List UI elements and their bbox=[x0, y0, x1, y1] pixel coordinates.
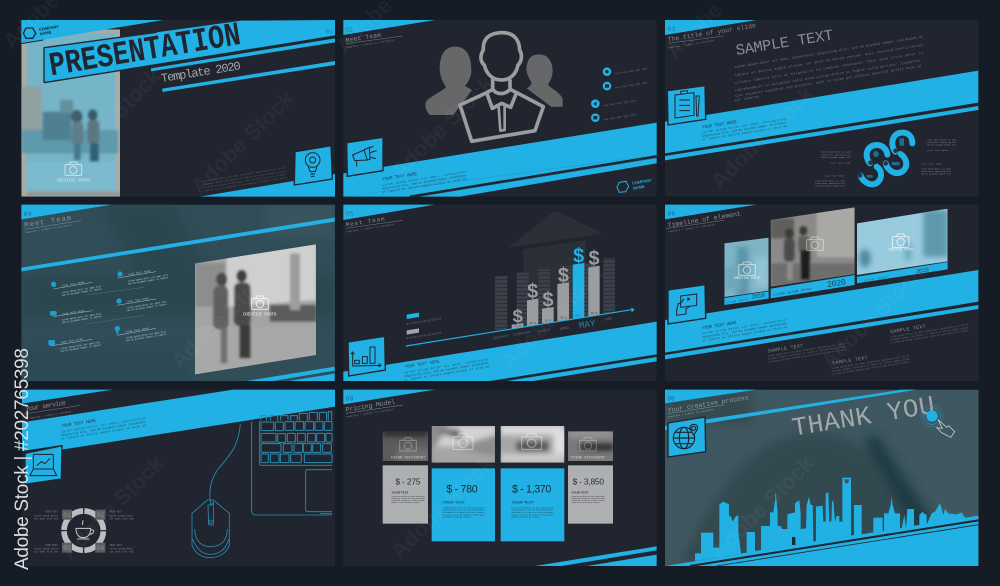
pricing photo 2 bbox=[432, 425, 497, 465]
title band: PRESENTATION bbox=[47, 17, 244, 86]
price card 780 bbox=[432, 468, 495, 541]
blue diagonal stripe bbox=[21, 218, 335, 271]
pricing photo 4 bbox=[568, 428, 613, 461]
band text: Lorem ipsum dolor sit amet, consectetur bbox=[382, 169, 467, 187]
watermarks: Adobe Stock bbox=[186, 85, 299, 199]
bar chart: 00.0 bbox=[560, 317, 567, 320]
subtitle with stripes bbox=[151, 38, 335, 92]
price card 780: aliqua ut enim ad minim veniam quis bbox=[442, 513, 484, 516]
band text: ut labore et dolore magna aliqua ut enim ad bbox=[702, 325, 788, 343]
top-left blue corner with company name: COMPANY bbox=[39, 24, 60, 32]
band text: ut labore et dolore magna aliqua ut enim ad bbox=[382, 177, 467, 194]
text block B: Lorem ipsum dolor sit amet consectetur adipiscing elit sed do bbox=[832, 354, 910, 370]
blue band bbox=[665, 270, 978, 353]
donut diagram: 01 bbox=[63, 512, 71, 519]
slide heading: Your creative process bbox=[667, 393, 749, 414]
band text: adipiscing elit, sed do eiusmod tempor incididunt bbox=[61, 420, 146, 437]
price card 780: Lorem ipsum dolor sit amet consectetur bbox=[442, 506, 485, 509]
bar chart: $ bbox=[588, 249, 600, 272]
slide heading bbox=[345, 32, 403, 49]
blue band bbox=[22, 390, 335, 451]
band text: Lorem ipsum dolor sit amet, consectetur bbox=[404, 357, 490, 375]
cover photo bbox=[21, 29, 120, 197]
band text bbox=[61, 416, 146, 441]
slide heading: Template | simple to customize bbox=[668, 223, 715, 234]
icon: megaphone bbox=[347, 137, 383, 176]
text block B: eiusmod tempor incididunt ut labore et dolore magna aliqua bbox=[832, 357, 910, 373]
caption 2020 bbox=[771, 275, 855, 298]
feature list: sed do eiusmod tempor ut labore bbox=[126, 303, 168, 312]
pricing photo 1 bbox=[382, 432, 428, 461]
band text: Lorem ipsum dolor sit amet, consectetur bbox=[61, 416, 146, 434]
donut labels: YOUR TEXT bbox=[45, 544, 58, 547]
company logo: COMPANY bbox=[632, 177, 653, 186]
feature list: sed do eiusmod tempor ut labore bbox=[126, 333, 167, 342]
blue band bbox=[343, 123, 657, 197]
feature list: Lorem ipsum dolor sit amet elit bbox=[62, 312, 102, 322]
bar chart: 00.0 bbox=[575, 315, 582, 318]
slide heading: Template | simple to customize bbox=[29, 410, 72, 420]
swirl labels: consectetur adipiscing elit bbox=[927, 141, 957, 144]
price card 3850: aliqua ut enim ad minim veniam bbox=[571, 501, 600, 504]
price card 1370: YOUR TEXT bbox=[511, 499, 535, 504]
text block C: SAMPLE TEXT bbox=[890, 324, 926, 335]
band text: YOUR TEXT HERE bbox=[702, 320, 737, 331]
subtitle with stripes: Template 2020 bbox=[160, 59, 242, 86]
top-left blue corner bbox=[665, 390, 757, 403]
caption 2018: 2018 bbox=[751, 292, 766, 301]
slide heading: Template | simple to customize bbox=[346, 408, 394, 419]
text block C: eiusmod tempor incididunt ut labore et dolore magna aliqua bbox=[890, 326, 969, 342]
laptop outline bbox=[252, 412, 332, 515]
paragraph: reprehenderit in voluptate velit esse cillum dolore eu fugiat nulla pariatur. Excepteur bbox=[735, 58, 921, 92]
slide heading: Template | simple to customize bbox=[24, 224, 72, 234]
paragraph: ullamco laboris nisi ut aliquip ex ea commodo consequat. Duis aute irure dolor in bbox=[735, 51, 923, 85]
donut labels: Lorem ipsum dolor bbox=[34, 514, 59, 517]
slide heading: Your service bbox=[25, 399, 66, 413]
feature list: YOUR TEXT HERE bbox=[62, 309, 85, 316]
price card 780: $ - 780 bbox=[446, 483, 478, 495]
swirl labels: consectetur adipiscing elit bbox=[921, 170, 952, 173]
donut diagram bbox=[62, 510, 105, 553]
donut labels: sit amet elit sed bbox=[109, 551, 134, 554]
band text: adipiscing elit, sed do eiusmod tempor incididunt bbox=[404, 361, 490, 378]
slide 01: cover bbox=[21, 17, 335, 197]
top-left blue corner bbox=[343, 390, 435, 404]
contact list: +00 000 000 000 000 bbox=[603, 99, 636, 108]
slide 08: pricing model bbox=[343, 390, 657, 566]
slide heading: Template | simple to customize bbox=[346, 223, 394, 234]
swirl labels: YOUR TEXT HERE bbox=[830, 162, 851, 165]
slide heading: Template | simple to customize bbox=[668, 408, 715, 419]
photo 2018 bbox=[724, 238, 769, 297]
slide number: 06 bbox=[668, 210, 676, 218]
small caption text: laboris nisi ut aliquip ex ea commodo consequat duis aute bbox=[203, 176, 287, 193]
thank you heading: THANK YOU bbox=[790, 391, 937, 444]
bottom blue stripes bbox=[665, 516, 978, 566]
watermarks: Adobe Stock bbox=[166, 260, 279, 374]
month labels: FEBRUARY bbox=[513, 331, 533, 338]
contact list: +00 000 000 000 000 bbox=[615, 81, 648, 90]
price card 1370: Lorem ipsum dolor sit amet consectetur bbox=[511, 506, 554, 509]
feature list: Lorem ipsum dolor sit amet elit bbox=[62, 285, 102, 294]
caption 2018: Lorem ipsum bbox=[726, 297, 749, 304]
slide 03: sample text bbox=[665, 20, 979, 197]
price card 275: Lorem ipsum dolor sit amet consectetur bbox=[391, 495, 425, 498]
slide 02: meet team bbox=[343, 20, 657, 197]
text block A: Lorem ipsum dolor sit amet consectetur adipiscing elit sed do bbox=[768, 342, 846, 358]
blue band bbox=[343, 322, 657, 381]
slide heading bbox=[24, 399, 81, 420]
slide heading bbox=[345, 398, 403, 419]
band text: YOUR TEXT HERE bbox=[702, 119, 737, 131]
slide heading: Template | simple to customize bbox=[346, 39, 394, 49]
text block A: SAMPLE TEXT bbox=[767, 343, 804, 355]
price card 275: adipiscing elit sed do eiusmod tempor bbox=[391, 497, 425, 500]
small caption text: eiusmod tempor incididunt ut labore et dolore magna aliqua bbox=[203, 170, 287, 186]
axis arrow bbox=[406, 307, 635, 346]
donut diagram: 02 bbox=[97, 512, 104, 519]
donut labels: sit amet elit sed bbox=[109, 517, 134, 520]
price card 1370: nostrud exercitation ullamco bbox=[511, 516, 540, 519]
slide 06: timeline bbox=[665, 205, 979, 381]
bar chart bbox=[512, 246, 600, 329]
slide heading: Meet Team bbox=[345, 215, 386, 229]
price card 1370: incididunt ut labore et dolore magna bbox=[511, 511, 554, 514]
slide heading: The title of your slide bbox=[667, 21, 757, 44]
slide number: 01 bbox=[325, 28, 333, 35]
contact list: +00 000 000 000 000 bbox=[603, 113, 636, 122]
feature list: sed do eiusmod tempor ut labore bbox=[128, 276, 169, 286]
photo 2018: CREATIVE PHOTO bbox=[734, 277, 761, 281]
price card 1370: adipiscing elit sed do eiusmod tempor bbox=[511, 509, 554, 512]
price card 780: YOUR TEXT bbox=[442, 499, 466, 504]
text block B: ut enim ad minim veniam quis nostrud exercitation ullamco bbox=[832, 360, 910, 376]
dark divider bbox=[410, 156, 657, 197]
price card 780: adipiscing elit sed do eiusmod tempor bbox=[442, 509, 485, 512]
vertical stock id: Adobe Stock | #202765398 bbox=[12, 348, 33, 570]
bottom-right stripes bbox=[246, 367, 335, 381]
band text: ut labore et dolore magna aliqua ut enim ad bbox=[61, 423, 146, 441]
bar chart: 00.0 bbox=[545, 319, 552, 322]
bar chart: $ bbox=[573, 246, 585, 269]
price card 3850: incididunt ut labore et dolore magna bbox=[571, 499, 605, 502]
text block B: SAMPLE TEXT bbox=[832, 355, 868, 367]
sample text heading: SAMPLE TEXT bbox=[735, 26, 835, 60]
text block C: Lorem ipsum dolor sit amet consectetur adipiscing elit sed do bbox=[890, 323, 969, 339]
swirl diagram bbox=[858, 133, 912, 184]
band text: YOUR TEXT HERE bbox=[405, 359, 440, 370]
donut diagram: 04 bbox=[97, 545, 104, 552]
blue band bbox=[665, 71, 978, 153]
top-left blue corner bbox=[22, 390, 113, 404]
icon: light bulb bbox=[294, 146, 332, 185]
band text: ut labore et dolore magna aliqua ut enim ad bbox=[404, 364, 490, 382]
feature list: YOUR TEXT HERE bbox=[128, 270, 151, 276]
blue diagonal stripe bbox=[705, 390, 917, 424]
slide heading: Template | simple to customize bbox=[668, 39, 715, 50]
month labels bbox=[492, 317, 613, 341]
pricing photo 3 bbox=[501, 425, 567, 463]
feature list: sed do eiusmod tempor ut labore bbox=[62, 288, 102, 297]
donut labels: Lorem ipsum dolor bbox=[109, 548, 134, 551]
photo 2019 bbox=[857, 209, 948, 275]
swirl labels: sed do eiusmod tempor elit bbox=[821, 156, 852, 159]
click cursor bbox=[921, 405, 955, 437]
text block A: ut enim ad minim veniam quis nostrud exercitation ullamco bbox=[768, 348, 846, 364]
slide 04: meet team with photo bbox=[21, 205, 335, 381]
blue stripe bbox=[665, 106, 978, 160]
caption 2020: 2020 bbox=[826, 277, 847, 290]
swirl labels: sed do eiusmod tempor elit bbox=[815, 185, 846, 188]
bar chart: $ bbox=[527, 281, 539, 304]
price card 275: aliqua ut enim ad minim veniam bbox=[391, 501, 420, 504]
slide heading bbox=[345, 215, 403, 234]
slide number: 09 bbox=[667, 396, 675, 403]
feature list: YOUR TEXT HERE bbox=[126, 327, 149, 334]
company logo: NAME bbox=[633, 184, 645, 191]
band text: ut labore et dolore magna aliqua ut enim ad bbox=[702, 124, 788, 142]
price card 3850: Lorem ipsum dolor sit amet consectetur bbox=[571, 495, 605, 498]
legend: 00000000000000 bbox=[406, 317, 442, 326]
blue stripe bbox=[665, 305, 978, 359]
caption 2019 bbox=[857, 262, 948, 283]
feature list: Lorem ipsum dolor sit amet elit bbox=[128, 273, 169, 283]
slide 09: thank you bbox=[665, 390, 979, 566]
watermarks: Adobe Stock bbox=[56, 450, 169, 564]
paragraph bbox=[735, 35, 923, 102]
bar chart: 00.0 bbox=[514, 325, 521, 328]
small caption text bbox=[203, 166, 287, 193]
swirl labels: Lorem ipsum dolor sit amet bbox=[927, 138, 957, 141]
feature list bbox=[48, 270, 169, 353]
photo 2019: CREATIVE PHOTO bbox=[888, 249, 914, 253]
bank silhouette backdrop bbox=[508, 212, 602, 325]
small caption text: ut enim ad minim veniam quis nostrud exercitation ullamco bbox=[203, 173, 287, 189]
month labels: MAY bbox=[578, 318, 597, 331]
bottom-right stripes bbox=[535, 546, 657, 566]
band text bbox=[702, 318, 788, 343]
price card 275 bbox=[383, 465, 428, 524]
bottom-right blue wedge bbox=[200, 174, 335, 197]
icon: globe with pin bbox=[668, 417, 706, 457]
swirl labels: Lorem ipsum dolor sit amet bbox=[821, 151, 852, 154]
slide number: 05 bbox=[345, 210, 353, 218]
caption 2019: Lorem ipsum bbox=[864, 275, 888, 282]
swirl labels: YOUR TEXT HERE bbox=[927, 149, 948, 152]
striped background bars bbox=[495, 258, 615, 330]
watermarks: Adobe Stock bbox=[706, 80, 819, 194]
watermarks: Adobe Stock bbox=[496, 260, 609, 374]
photo placeholder: CREATIVE PHOTO bbox=[243, 313, 277, 318]
text block C: ut enim ad minim veniam quis nostrud exercitation ullamco bbox=[890, 329, 969, 345]
city skyline bbox=[695, 478, 965, 561]
icon: hand with phone bbox=[668, 285, 706, 324]
price card 780: incididunt ut labore et dolore magna bbox=[442, 511, 485, 514]
price card 780: nostrud exercitation ullamco bbox=[442, 516, 471, 519]
paragraph: labore et dolore magna aliqua. Ut enim ad minim veniam, quis nostrud exercitation bbox=[735, 43, 923, 77]
price card 275: YOUR TEXT bbox=[391, 490, 409, 494]
month labels: JANUARY bbox=[492, 335, 510, 341]
top-left blue corner bbox=[665, 20, 757, 35]
top-left blue corner bbox=[665, 205, 757, 219]
photo 2020 bbox=[771, 207, 857, 287]
icon: team silhouettes back bbox=[425, 47, 563, 115]
donut labels: YOUR TEXT bbox=[109, 511, 123, 514]
donut labels: YOUR TEXT bbox=[45, 511, 58, 514]
swirl labels: Lorem ipsum dolor sit amet bbox=[921, 167, 952, 170]
swirl labels: YOUR TEXT HERE bbox=[921, 162, 942, 165]
slide 07: our service bbox=[22, 390, 335, 566]
icon: coffee cup bbox=[76, 520, 94, 539]
month labels: APRIL bbox=[560, 326, 571, 332]
price card 3850: adipiscing elit sed do eiusmod tempor bbox=[571, 497, 605, 500]
caption 2019: 2019 bbox=[915, 266, 930, 275]
feature list: sed do eiusmod tempor ut labore bbox=[62, 315, 102, 324]
blue stripe bbox=[507, 357, 657, 381]
swirl labels bbox=[815, 138, 957, 188]
price card 275: $ - 275 bbox=[395, 477, 421, 487]
swirl labels: sed do eiusmod tempor elit bbox=[921, 173, 952, 176]
price card 1370: $ - 1,370 bbox=[512, 483, 551, 495]
icon: clipboard bbox=[667, 86, 706, 125]
photo placeholder bbox=[195, 237, 318, 377]
donut labels: Lorem ipsum dolor bbox=[34, 548, 59, 551]
small caption text: Lorem ipsum dolor sit amet consectetur adipiscing elit sed do bbox=[203, 166, 287, 183]
slide heading: Pricing Model bbox=[345, 398, 396, 414]
top-left blue corner bbox=[343, 20, 435, 35]
donut labels bbox=[34, 511, 134, 554]
price card 1370 bbox=[501, 468, 564, 541]
cover photo: CREATIVE PHOTO bbox=[57, 178, 90, 183]
top-left blue corner with company name: NAME bbox=[39, 29, 52, 36]
band text: Lorem ipsum dolor sit amet, consectetur bbox=[702, 318, 788, 335]
feature list: Lorem ipsum dolor sit amet elit bbox=[126, 300, 168, 310]
top-left blue corner bbox=[343, 205, 435, 220]
month labels: JUNE bbox=[604, 317, 613, 323]
slide 05: chart bbox=[343, 205, 657, 382]
band text: adipiscing elit, sed do eiusmod tempor incididunt bbox=[702, 321, 788, 339]
blurred background photo bbox=[665, 390, 979, 566]
pricing photo 1: THINK DIFFERENT bbox=[391, 456, 426, 460]
paragraph: est laborum. bbox=[735, 94, 761, 102]
top-left blue corner bbox=[21, 205, 112, 219]
slide number: 03 bbox=[667, 25, 675, 33]
slide heading: Meet Team bbox=[345, 32, 382, 44]
band text bbox=[702, 117, 788, 142]
slide number: 02 bbox=[345, 25, 353, 33]
donut labels: YOUR TEXT bbox=[109, 544, 123, 547]
paragraph: Lorem ipsum dolor sit amet, consectetur adipiscing elit, sed do eiusmod tempor incididunt ut bbox=[735, 35, 923, 69]
watermarks: Adobe Stock bbox=[386, 450, 499, 564]
slide number: 08 bbox=[345, 394, 353, 402]
bar chart: $ bbox=[542, 290, 554, 313]
swirl labels: YOUR TEXT HERE bbox=[824, 174, 845, 177]
price card 3850: $ - 3,850 bbox=[573, 477, 604, 487]
swirl labels: sed do eiusmod tempor elit bbox=[927, 144, 957, 147]
text block A: eiusmod tempor incididunt ut labore et dolore magna aliqua bbox=[768, 345, 846, 361]
legend bbox=[406, 313, 442, 340]
icon: bar chart bbox=[348, 336, 385, 376]
swirl labels: Lorem ipsum dolor sit amet bbox=[815, 179, 846, 182]
bar chart: $ bbox=[557, 265, 569, 288]
band text: adipiscing elit, sed do eiusmod tempor incididunt bbox=[382, 173, 467, 191]
feature list: YOUR TEXT HERE bbox=[126, 297, 150, 304]
icon: central person outline bbox=[460, 33, 543, 141]
slide heading: Timeline of element bbox=[667, 210, 741, 229]
donut labels: sit amet elit sed bbox=[34, 517, 59, 520]
band text: YOUR TEXT HERE bbox=[382, 171, 418, 183]
price card 1370: aliqua ut enim ad minim veniam quis bbox=[511, 513, 553, 516]
feature list: YOUR TEXT HERE bbox=[60, 338, 84, 344]
band text: adipiscing elit, sed do eiusmod tempor incididunt bbox=[702, 120, 788, 138]
feature list: Lorem ipsum dolor sit amet elit bbox=[126, 330, 167, 340]
donut labels: sit amet elit sed bbox=[34, 551, 59, 554]
band text: Lorem ipsum dolor sit amet, consectetur bbox=[702, 117, 788, 134]
pricing photo 4: THINK DIFFERENT bbox=[570, 456, 606, 460]
swirl labels: consectetur adipiscing elit bbox=[821, 153, 852, 156]
watermarks: Adobe Stock bbox=[386, 70, 499, 184]
price card 3850 bbox=[568, 465, 613, 524]
legend: 00000000000000 bbox=[406, 332, 442, 340]
paragraph: sint occaecat cupidatat non proident, sunt in culpa qui officia deserunt mollit anim id bbox=[735, 64, 921, 98]
band text bbox=[404, 357, 490, 382]
bar chart: $ bbox=[512, 306, 523, 328]
price card 3850: YOUR TEXT bbox=[571, 490, 589, 494]
mouse outline bbox=[192, 424, 240, 558]
feature list: Lorem ipsum dolor sit amet elit bbox=[60, 341, 102, 350]
price card 275: incididunt ut labore et dolore magna bbox=[391, 499, 425, 502]
band text bbox=[382, 169, 467, 194]
watermarks: Adobe Stock bbox=[816, 260, 929, 374]
watermarks: Adobe Stock bbox=[706, 450, 819, 564]
blue stripe with dark cut bbox=[419, 158, 657, 197]
bar chart: 00.0 bbox=[591, 312, 598, 315]
slide heading: Meet Team bbox=[24, 215, 72, 230]
swirl labels: consectetur adipiscing elit bbox=[815, 182, 846, 185]
slide number: 04 bbox=[24, 210, 32, 218]
caption 2018 bbox=[724, 291, 769, 305]
company logo bbox=[617, 177, 653, 192]
donut diagram: 03 bbox=[63, 545, 71, 552]
donut labels: Lorem ipsum dolor bbox=[109, 514, 134, 517]
blurred background photo bbox=[21, 205, 335, 381]
month labels: MARCH bbox=[538, 329, 551, 335]
feature list: sed do eiusmod tempor ut labore bbox=[60, 343, 102, 353]
top-left blue corner with company name bbox=[21, 20, 163, 44]
slide heading bbox=[24, 215, 81, 234]
bar chart: 00.0 bbox=[529, 322, 536, 325]
watermarks: Stock bbox=[106, 63, 166, 124]
icon: laptop chart bbox=[25, 446, 62, 484]
contact list bbox=[591, 67, 648, 122]
contact list: +00 000 000 000 000 bbox=[615, 67, 648, 76]
band text: YOUR TEXT HERE bbox=[61, 418, 97, 429]
feature list: YOUR TEXT HERE bbox=[62, 281, 85, 288]
caption 2020: Lorem ipsum dolor bbox=[773, 287, 812, 298]
